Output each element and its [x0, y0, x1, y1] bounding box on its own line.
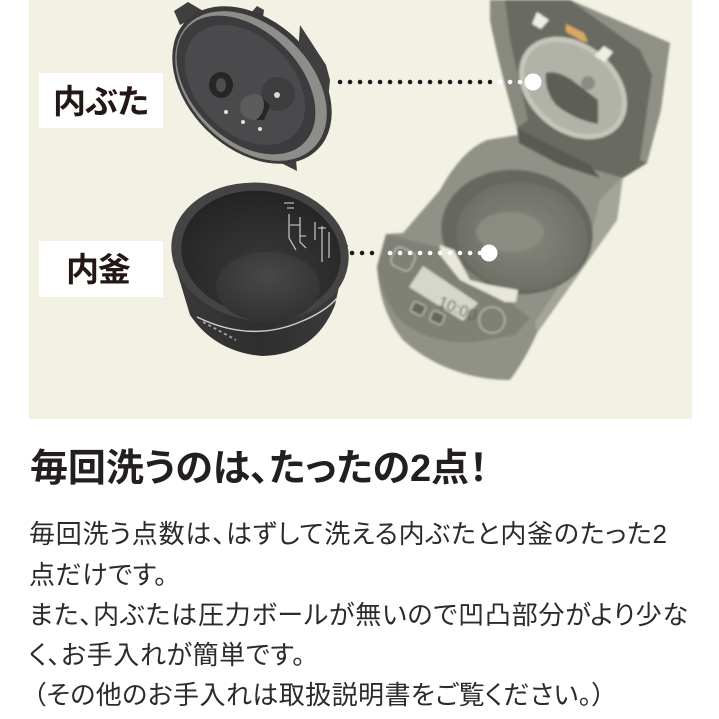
- lid center plate: [162, 2, 328, 168]
- label: inner pot: 内釜: [66, 251, 131, 288]
- pot floor: [216, 252, 320, 322]
- cooker lid open: [490, 0, 670, 178]
- body text: 点だけです。: [29, 560, 167, 590]
- cooker inner pot: [449, 173, 595, 299]
- pot side printing: [203, 322, 236, 340]
- cooker base side: [535, 176, 623, 333]
- image: inner pot: [162, 171, 358, 356]
- pot outer body: [172, 245, 348, 356]
- body text: また、内ぶたは圧力ボールが無いので凹凸部分がより少な: [29, 600, 688, 630]
- label: inner lid: [39, 73, 163, 128]
- lid small white dots: [224, 110, 262, 131]
- lid tabs: [174, 2, 297, 171]
- body text: [29, 519, 688, 710]
- lid outer shell: [570, 0, 670, 163]
- label: inner lid: 内ぶた: [53, 83, 149, 120]
- heading: 毎回洗うのは、たったの2点！: [30, 448, 488, 490]
- lid main plate: [150, 0, 342, 181]
- callout: pot dotted leader: [352, 244, 498, 262]
- lid plate valve: [581, 76, 595, 90]
- pot rim: [162, 171, 358, 333]
- pot water level marks: [284, 203, 329, 262]
- lid outer edge: [141, 0, 363, 195]
- lid white clips: [532, 12, 613, 62]
- lid plate dark opening: [546, 72, 598, 124]
- cooker inner pot rim: [433, 160, 601, 304]
- lid inner plate: [499, 16, 647, 160]
- body text: 毎回洗う点数は、はずして洗える内ぶたと内釜のたった2: [29, 519, 667, 549]
- pot interior: [173, 180, 349, 326]
- image: inner lid: [141, 0, 363, 195]
- body text: （その他のお手入れは取扱説明書をご覧ください。）: [33, 680, 605, 710]
- cooker pot bottom highlight: [476, 212, 544, 252]
- image: rice cooker with open lid: [377, 0, 670, 380]
- lid gasket ring: [146, 0, 356, 190]
- lid right disc: [261, 77, 295, 111]
- control panel: [377, 234, 530, 342]
- white pot edge: [440, 245, 518, 302]
- callout: lid dotted leader: [340, 74, 542, 90]
- pot silver rim line: [197, 298, 337, 331]
- lid left shell: [490, 0, 528, 128]
- lid center vent: [240, 94, 268, 120]
- lcd display: [409, 266, 478, 321]
- lid orange latch: [566, 24, 588, 42]
- body text: く、お手入れが簡単です。: [29, 640, 305, 670]
- lid left valve: [209, 72, 233, 98]
- cooker base body: [377, 135, 623, 380]
- cooker hinge: [517, 128, 600, 178]
- label: inner pot: [39, 241, 163, 297]
- lcd time: 10:00: [436, 294, 479, 325]
- panel buttons: [389, 245, 505, 333]
- panel: product photo background: [29, 0, 692, 419]
